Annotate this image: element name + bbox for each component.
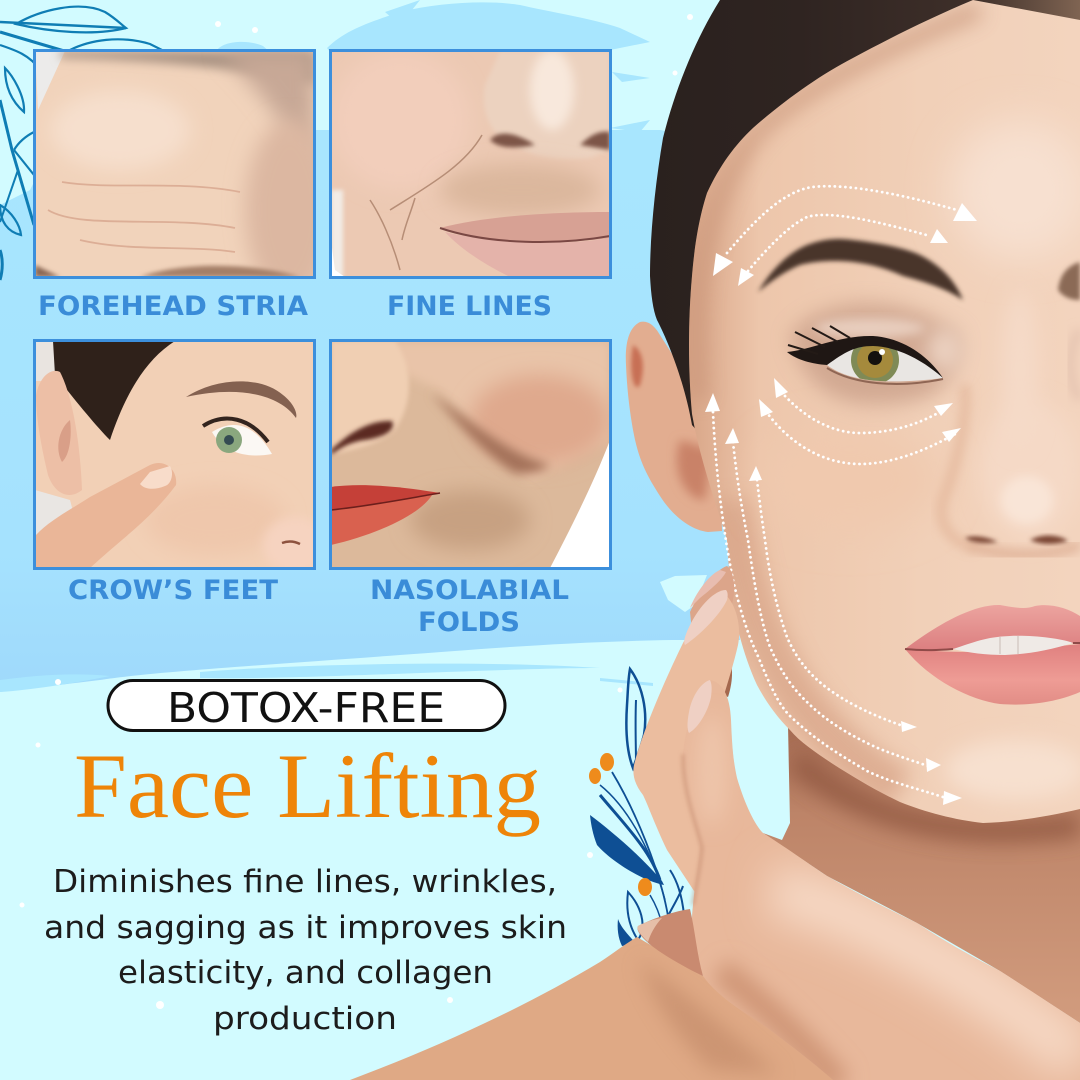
body text: elasticity, and collagen [118,955,493,991]
icon: orange and blue leaf sprig [589,669,684,946]
index finger [633,592,739,900]
frame: fine lines [330,50,610,278]
lips [905,605,1080,705]
nose [984,422,1067,530]
hair [650,0,1080,440]
photo: nasolabial folds [331,341,610,568]
photo: crow's feet [35,341,327,573]
far eye socket [1071,330,1080,400]
eye [787,326,943,384]
hand and second finger [683,680,1080,1080]
far eyebrow [1058,262,1080,300]
body text: Diminishes fine lines, wrinkles, [53,864,557,900]
thumb [637,909,703,976]
shoulder [350,937,840,1080]
ear [626,322,722,532]
frame: crow's feet [34,340,314,568]
frame: nasolabial folds [330,340,610,568]
back finger [690,566,734,660]
photo: fine lines [330,50,610,277]
body text [44,864,567,1037]
neck [763,725,1080,1023]
badge: botox-free: BOTOX-FREE [167,684,445,732]
photo: forehead stria [36,52,313,276]
label: crow's feet: CROW’S FEET [68,575,279,606]
label: nasolabial folds: FOLDS [418,607,520,638]
eyebrow [758,239,963,300]
finger crease [683,754,702,905]
body text: and sagging as it improves skin [44,910,567,946]
face [689,0,1080,823]
frame: forehead stria [34,50,314,278]
title: face lifting: Face Lifting [74,735,541,837]
label: nasolabial folds: NASOLABIAL [370,575,569,606]
icon: leaf sprig top left [0,7,178,280]
arrows: under-eye lift [759,378,961,464]
hand [633,566,1080,1080]
body text: production [213,1001,397,1037]
arrows: jawline lift [705,393,962,805]
label: fine lines: FINE LINES [387,291,552,322]
nails [684,590,728,645]
arrows: forehead lift [713,186,977,286]
label: forehead stria: FOREHEAD STRIA [38,291,308,322]
badge: botox-free [108,680,505,732]
eyeshadow [790,303,963,405]
label: nasolabial folds [370,575,569,638]
